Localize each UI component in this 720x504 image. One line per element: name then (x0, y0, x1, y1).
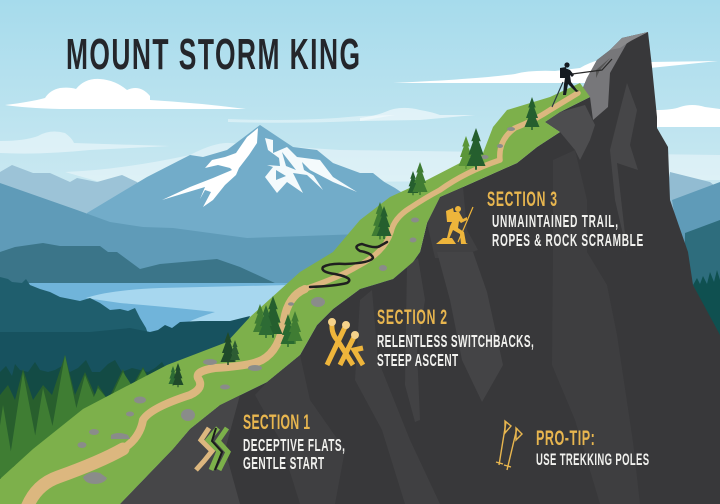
section 1 (196, 409, 345, 474)
light summit rock (574, 32, 648, 120)
heading: SECTION 2 (377, 304, 447, 329)
trail (26, 93, 578, 504)
heading: PRO-TIP: (536, 426, 595, 450)
description (243, 436, 345, 474)
title: MOUNT STORM KING (66, 29, 360, 79)
description: UNMAINTAINED TRAIL, (492, 212, 618, 232)
boulders (78, 127, 515, 484)
description (377, 332, 534, 371)
description (492, 212, 643, 251)
heading: SECTION 1 (243, 409, 310, 434)
climber on rope (552, 59, 612, 107)
icon: trekking poles (496, 421, 522, 470)
distant mountains (0, 165, 720, 504)
icon: winding trail (196, 428, 228, 470)
middle range (0, 183, 420, 290)
icon: switchbacks (327, 320, 363, 365)
green slope (0, 83, 590, 504)
sky background (0, 0, 720, 250)
description: ROPES & ROCK SCRAMBLE (492, 231, 643, 251)
pro tip (496, 421, 649, 470)
section 2 (327, 304, 534, 371)
rock cliff (120, 32, 720, 504)
heading: SECTION 3 (487, 186, 557, 211)
far shore hill (0, 243, 277, 284)
section 3 (436, 186, 643, 251)
description: GENTLE START (243, 454, 324, 474)
lake (25, 283, 295, 338)
description: RELENTLESS SWITCHBACKS, (377, 332, 534, 352)
description: DECEPTIVE FLATS, (243, 436, 345, 456)
icon: scrambling hiker (436, 206, 473, 244)
foreground pine trees (0, 355, 155, 504)
description: STEEP ASCENT (377, 351, 458, 371)
switchback section of trail (310, 242, 387, 287)
clouds (0, 60, 720, 182)
description: USE TREKKING POLES (536, 450, 649, 469)
main snow-capped peak (87, 125, 410, 245)
forest hills (0, 277, 250, 500)
slope trees (168, 97, 540, 387)
